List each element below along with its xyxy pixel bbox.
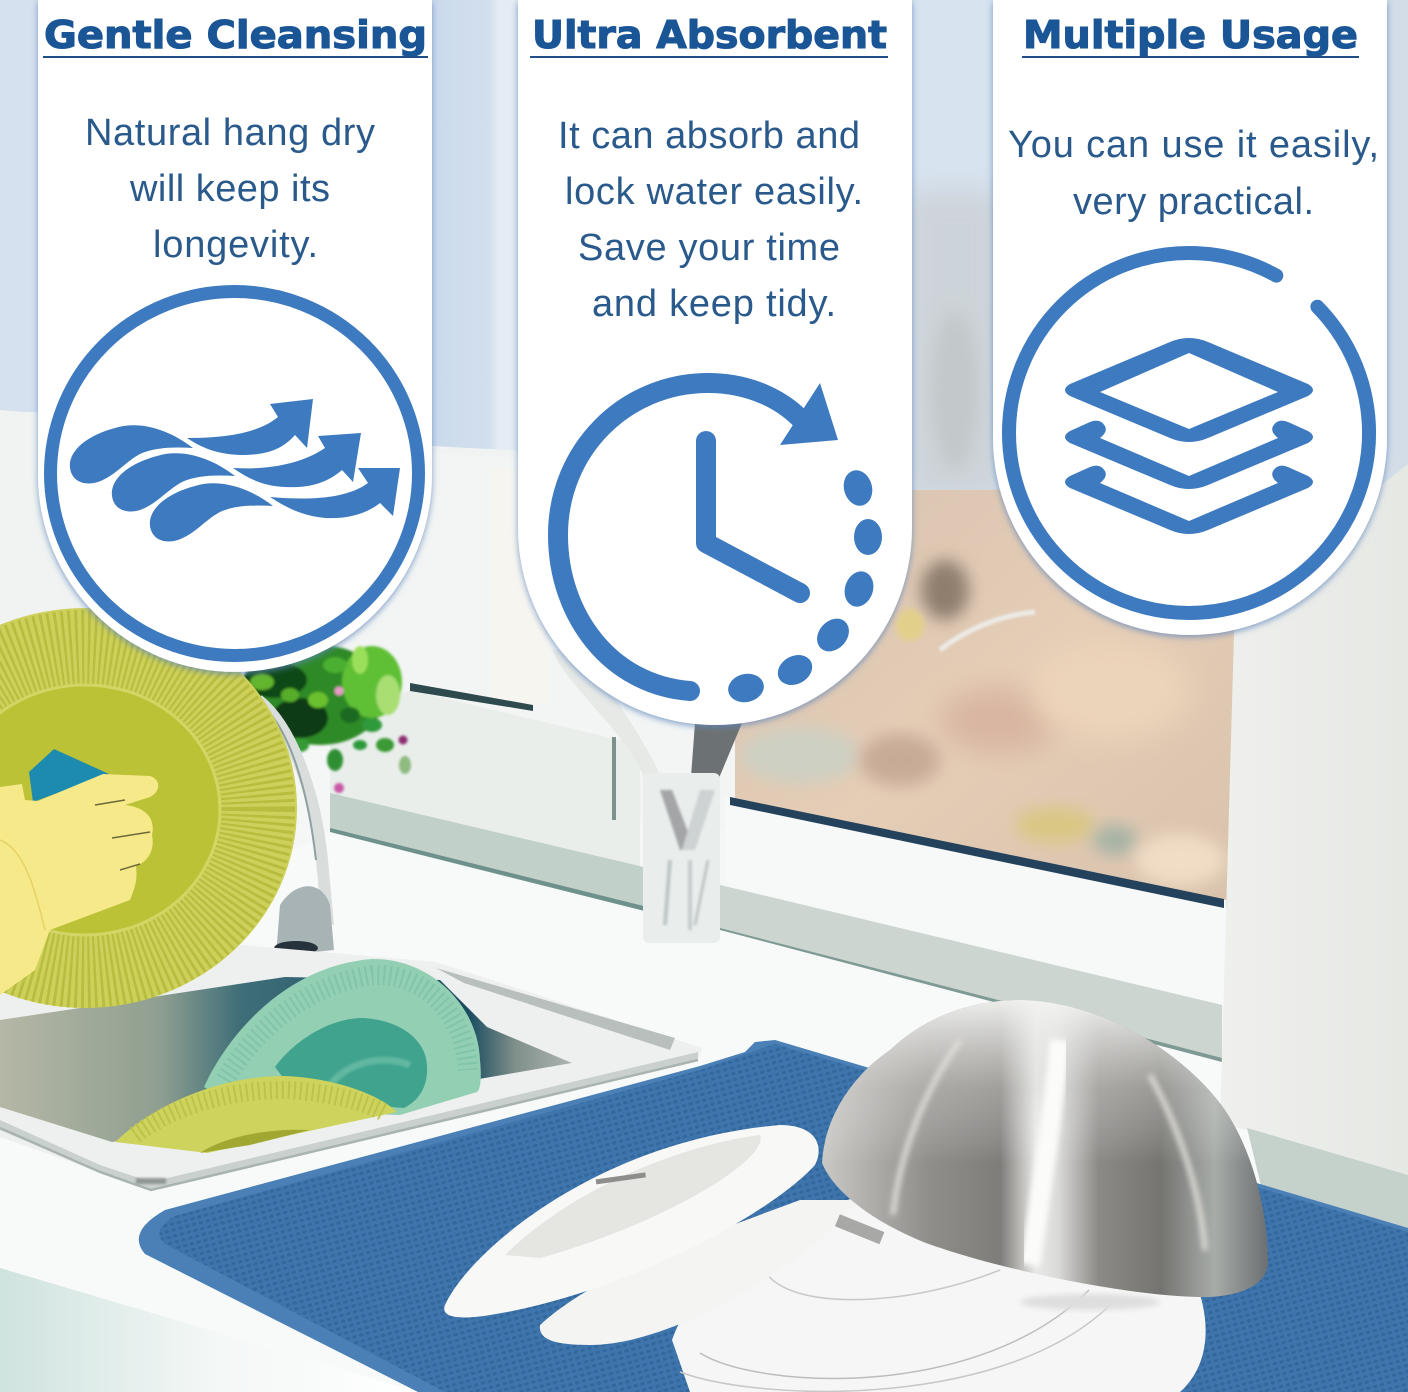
kitchen counter xyxy=(0,832,1408,1392)
steel bowl xyxy=(822,1000,1268,1297)
body text: very practical. xyxy=(1073,181,1314,223)
heading: Gentle Cleansing xyxy=(44,13,427,57)
wall base band xyxy=(1247,1128,1408,1232)
panel: gentle cleansing xyxy=(38,0,432,672)
sponge xyxy=(29,749,109,802)
body text xyxy=(1008,124,1379,223)
white plates stack xyxy=(444,1125,1206,1392)
panel background xyxy=(518,0,912,725)
drying mat xyxy=(139,1040,1408,1392)
counter front face xyxy=(0,1268,418,1392)
panel background xyxy=(993,0,1387,635)
right pillar xyxy=(1220,464,1408,1176)
heading: Ultra Absorbent xyxy=(532,13,887,57)
glass with utensils xyxy=(552,650,742,943)
large yellow plate xyxy=(0,608,297,1008)
yellow glove xyxy=(0,774,158,995)
panel: ultra absorbent xyxy=(518,0,912,725)
icon: stacked layers xyxy=(1009,253,1369,613)
green plate xyxy=(204,959,481,1115)
icon: clock with arrow xyxy=(558,383,882,705)
icon: air flow arrows xyxy=(50,292,418,656)
window frame and sill xyxy=(330,452,1226,1063)
faucet xyxy=(258,700,334,956)
body text: You can use it easily, xyxy=(1008,124,1379,166)
background: window view xyxy=(730,0,1408,910)
body text: lock water easily. xyxy=(565,171,863,213)
plant xyxy=(243,645,411,793)
body text xyxy=(85,112,375,266)
body text xyxy=(558,115,863,325)
body text: will keep its xyxy=(129,168,330,210)
sink xyxy=(0,945,702,1190)
body text: longevity. xyxy=(153,224,318,266)
body text: Save your time xyxy=(578,227,840,269)
heading: Multiple Usage xyxy=(1023,13,1358,57)
body text: It can absorb and xyxy=(558,115,860,157)
panel background xyxy=(38,0,432,672)
panel: multiple usage xyxy=(993,0,1387,635)
body text: Natural hang dry xyxy=(85,112,375,154)
lower yellow plate xyxy=(115,1076,397,1153)
body text: and keep tidy. xyxy=(592,283,836,325)
